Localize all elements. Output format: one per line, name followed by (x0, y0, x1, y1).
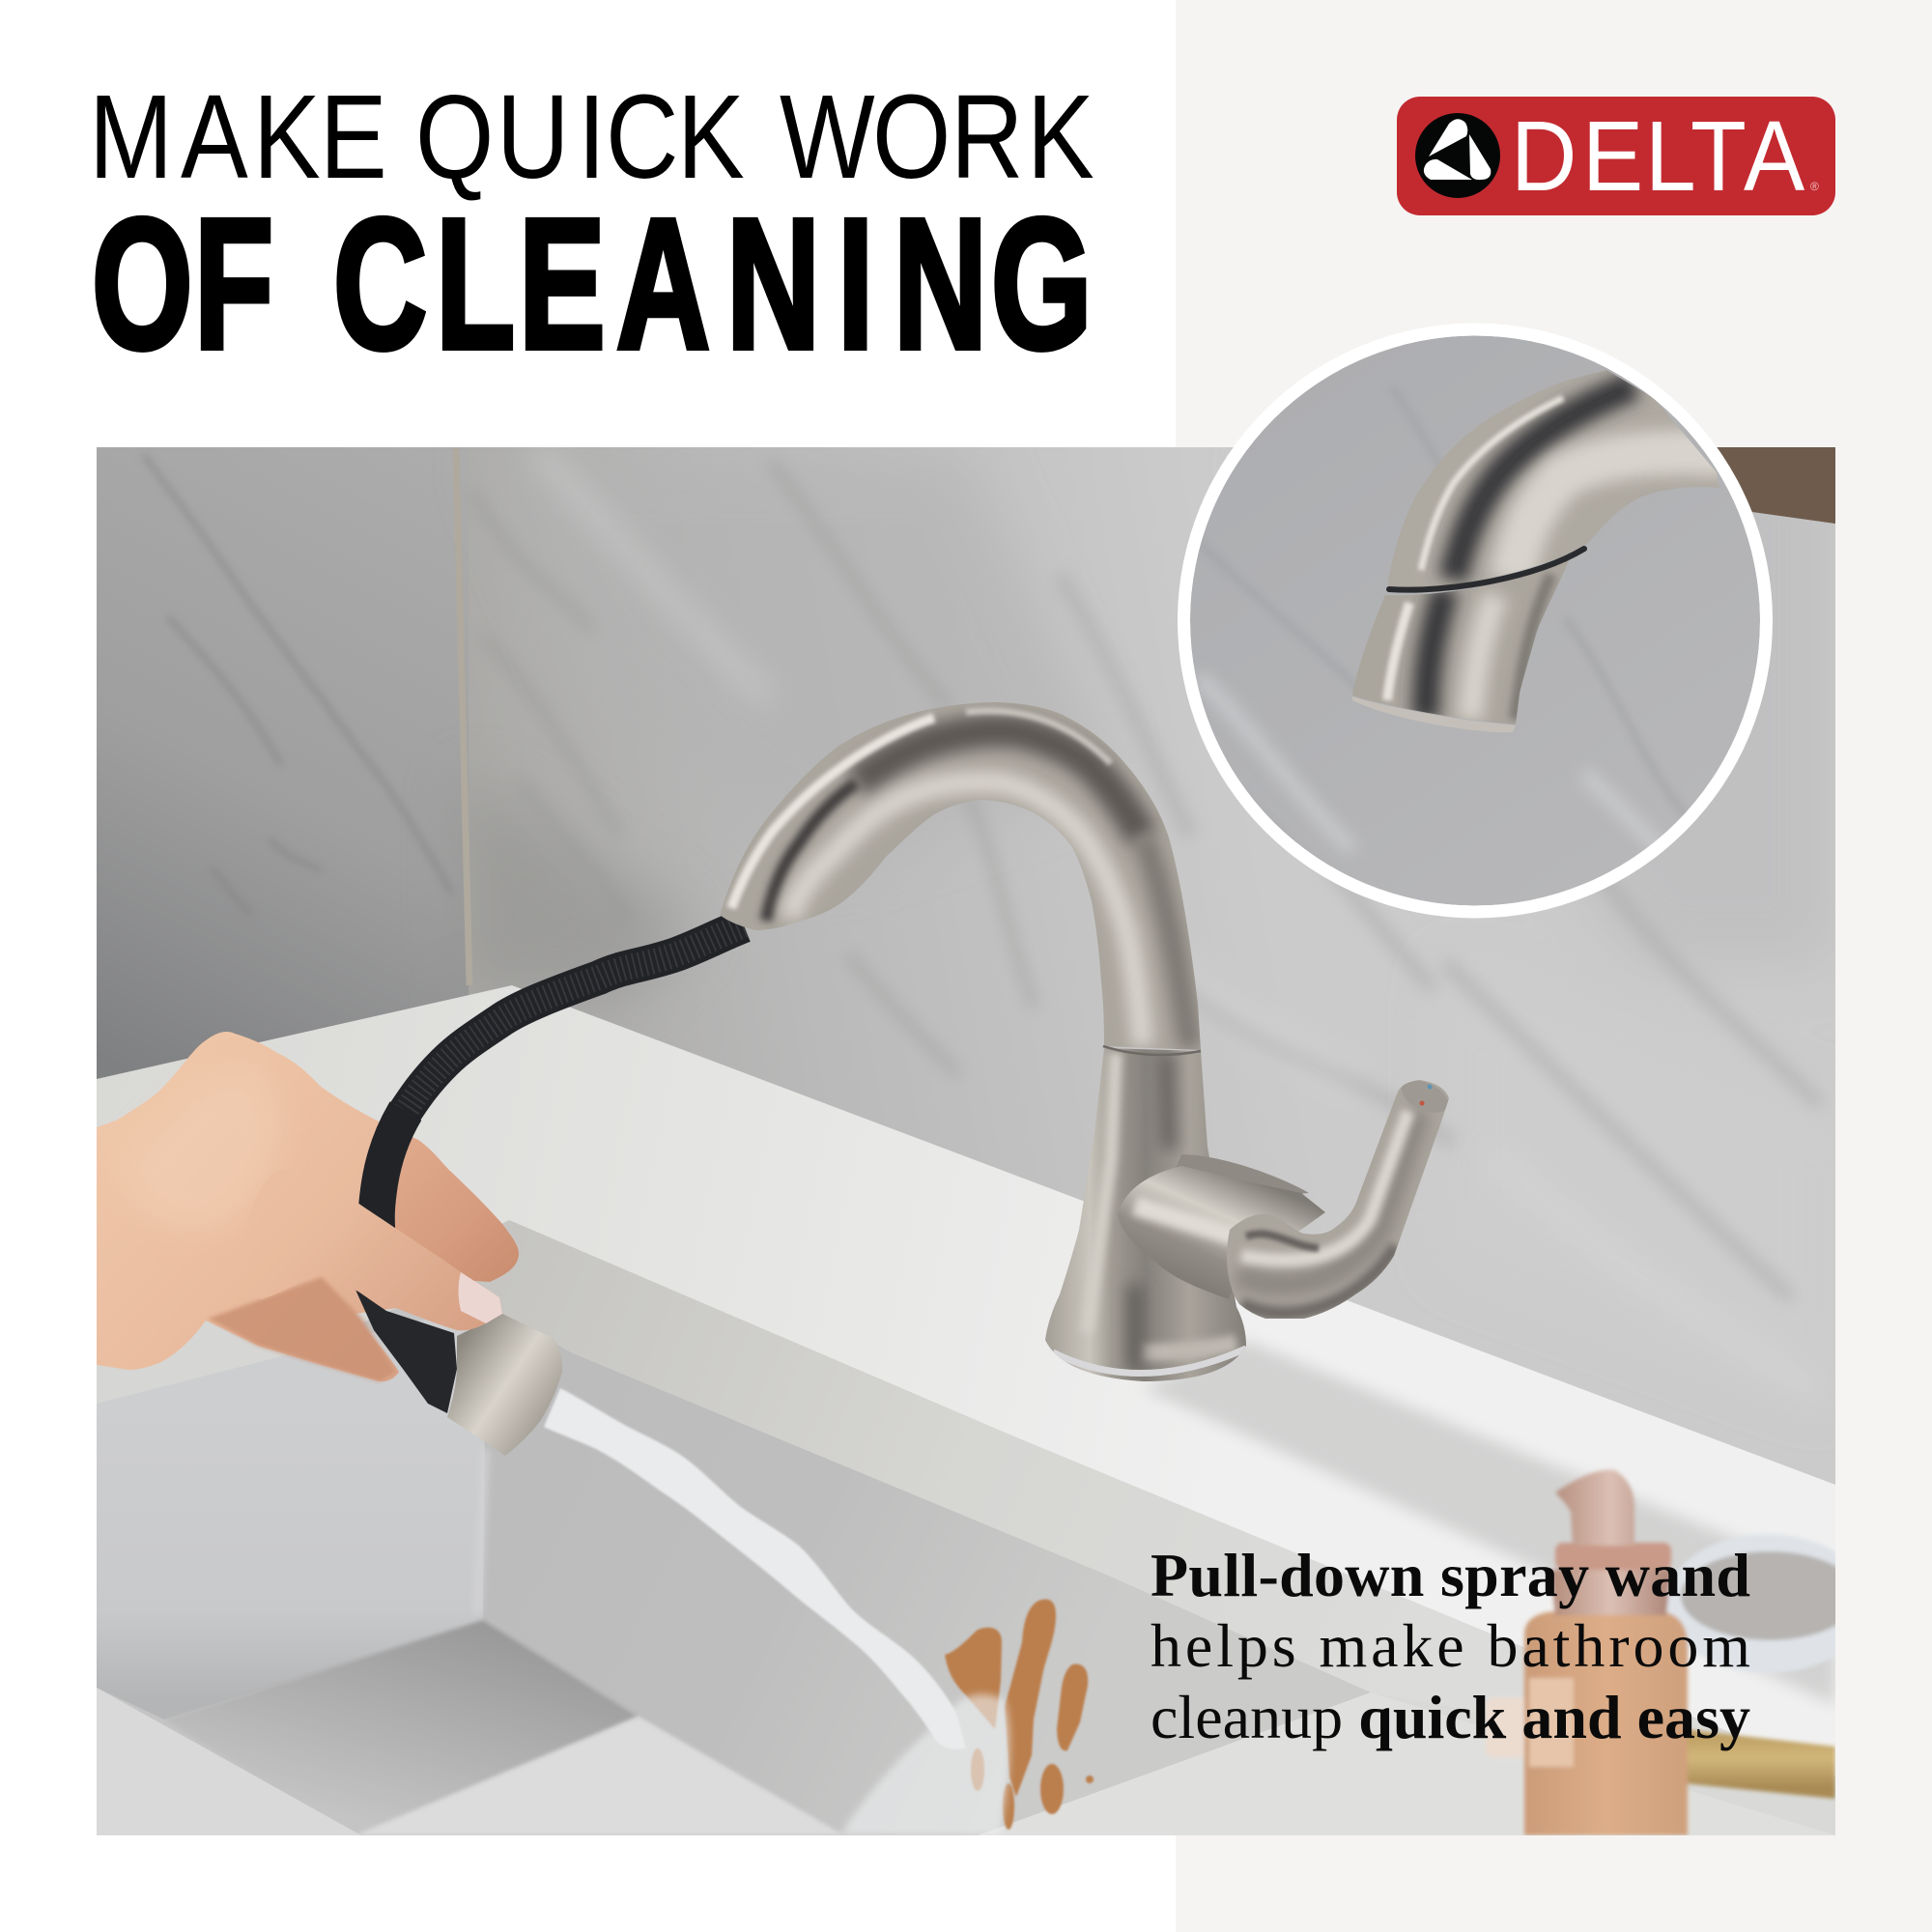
water stream (544, 1388, 1010, 1835)
faucet: collar seam (1103, 1046, 1201, 1055)
spray wand black grip (355, 1290, 457, 1413)
sink: corner crease highlight (483, 1449, 491, 1578)
title line two: OF CLEANING (92, 181, 1093, 388)
logo wordmark: DELTA (1511, 99, 1804, 212)
faucet: spout (715, 696, 1208, 1053)
wall: tile grout line (456, 447, 469, 985)
faucet: handle hub back (1174, 1154, 1309, 1198)
counter: front lip (475, 1220, 1731, 1735)
sink: left front counter (97, 1688, 361, 1835)
sink: left wall (97, 1304, 486, 1719)
hand holding spray wand (97, 1032, 562, 1456)
background: warm grey right panel (1176, 0, 1932, 1932)
foundation bottle body (1524, 1611, 1688, 1835)
sink: shaded floor (164, 1620, 639, 1835)
sink: basin back fill (97, 1304, 1371, 1835)
wall: left marble tile (97, 447, 469, 1104)
water splash (840, 1694, 1010, 1835)
hose through fingers (377, 1111, 406, 1246)
spray wand steel head (447, 1314, 562, 1456)
logo black circle (1415, 113, 1500, 198)
logo red badge (1397, 97, 1835, 215)
caption text (1151, 1541, 1750, 1751)
bottle label (1529, 1678, 1574, 1767)
faucet: hose (380, 925, 744, 1183)
title line one: MAKE QUICK WORK (89, 71, 1094, 204)
faucet: base body (1038, 1043, 1256, 1386)
water ribbon (544, 1388, 966, 1749)
inset detail circle (1178, 323, 1773, 927)
thumb (243, 1168, 502, 1330)
cream cap (1486, 1697, 1529, 1758)
caption line one: Pull-down spray wand (1151, 1541, 1750, 1609)
wall: right marble tiles (454, 447, 1835, 1510)
hand silhouette (97, 1032, 425, 1381)
foundation stains (945, 1599, 1094, 1830)
counter: top surface (97, 985, 1835, 1510)
caption line three: cleanup quick and easy (1151, 1683, 1750, 1751)
title (89, 71, 1094, 388)
thumb nail (458, 1272, 502, 1323)
makeup products, out of focus (1486, 1469, 1869, 1835)
inset black seal ring (1389, 549, 1584, 590)
bottle pump head (1555, 1469, 1634, 1546)
wood shelf edge (1717, 447, 1835, 524)
faucet: handle hub (1111, 1159, 1333, 1304)
Delta logo (1397, 97, 1835, 215)
bottle pump neck (1550, 1570, 1671, 1615)
bottle collar (1555, 1543, 1671, 1570)
wall: soft shadow over marble (469, 480, 1812, 1003)
faucet: lever handle (1222, 1073, 1454, 1323)
marble veins (145, 454, 1816, 1391)
inset spout upper (1381, 362, 1729, 599)
gold lipstick (1683, 1729, 1835, 1799)
sink: right wall (483, 1345, 1366, 1690)
lower palm shadow (208, 1277, 396, 1381)
inset spout lower (1348, 551, 1575, 729)
counter: faucet cast shadow (1143, 1341, 1835, 1705)
counter: left ledge (361, 1308, 394, 1321)
logo white triangle mark (1424, 119, 1491, 180)
fingers behind hose (386, 1125, 519, 1282)
photo: bathroom sink scene (97, 447, 1869, 1835)
sink: bright floor (355, 1717, 844, 1835)
inset spout outlet rim (1352, 696, 1516, 732)
compact lid (1681, 1551, 1859, 1640)
inset white ring (1178, 323, 1773, 918)
compact case (1666, 1534, 1869, 1673)
counter: lower right surface (978, 1692, 1835, 1835)
inset marble background (1190, 336, 1760, 927)
registered mark: ® (1810, 180, 1819, 193)
hand sheen (126, 1070, 279, 1229)
caption line two: helps make bathroom (1151, 1611, 1750, 1680)
lever hot and cold dots (1428, 1084, 1432, 1090)
